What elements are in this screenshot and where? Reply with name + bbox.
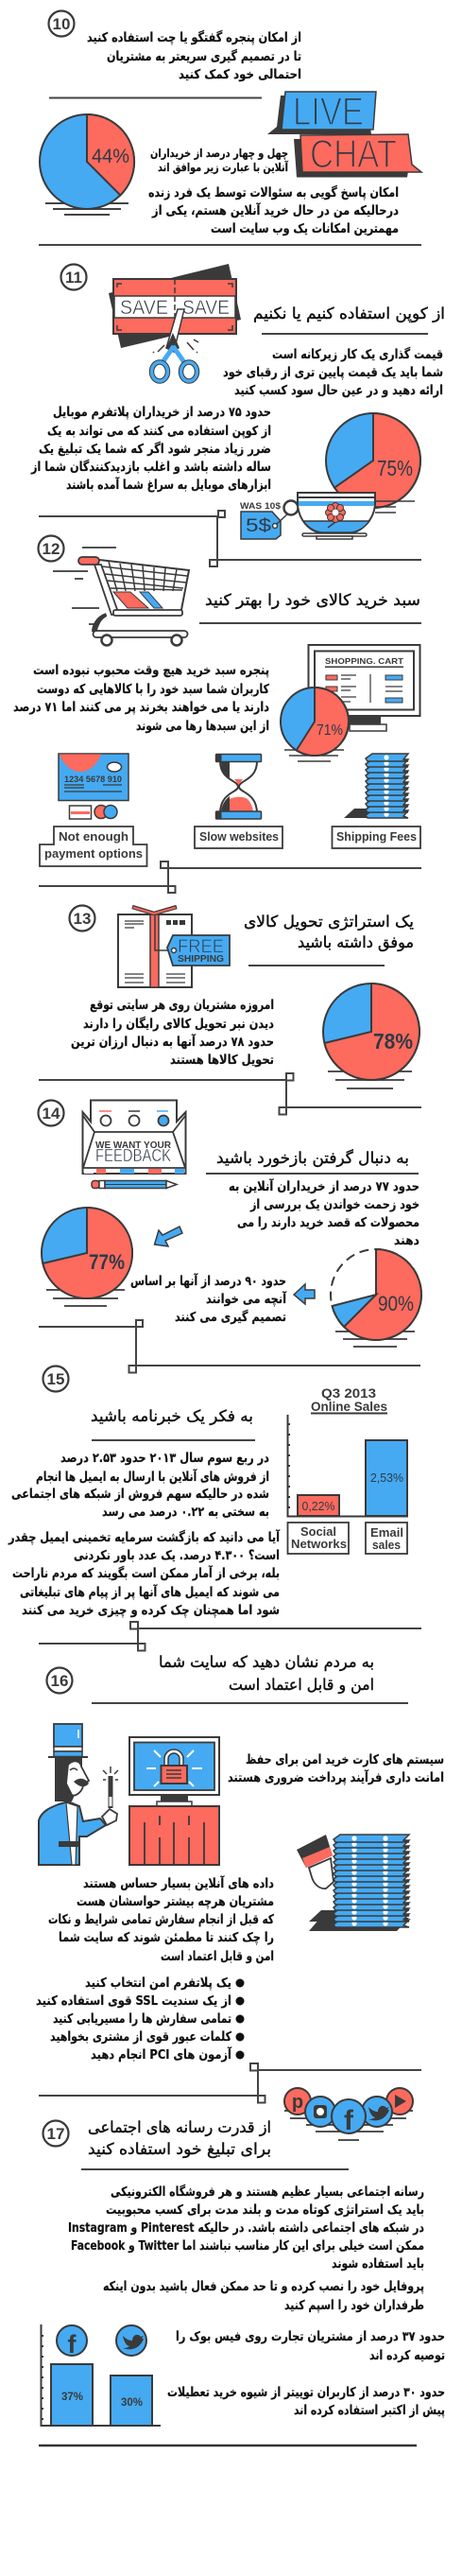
badge 17 <box>43 2120 68 2147</box>
text: 75 percent <box>30 405 271 493</box>
heading: به مردم نشان دهید که سایت شما <box>159 1653 374 1672</box>
text: cart abandonment: کاربران شما سبد خود را با کالاهایی که دوست <box>37 682 269 697</box>
pie chart 71%: 71% <box>317 722 343 739</box>
icon: coupon and scissors: SAVE <box>120 297 168 319</box>
text: email roi: شود اما همچنان چک کرده و چیزی خرید می کنند <box>22 1603 280 1618</box>
bar chart: facebook and twitter: 37% <box>61 2390 83 2403</box>
text: 75 percent: ساله داشته باشد و اغلب بازدیدکنندگان شما از <box>30 459 271 475</box>
text: 90 percent: آنچه می خوانند <box>206 1291 286 1307</box>
text: facebook stat: حدود ۳۷ درصد از مشتریان تجارت روی فیس بوک را <box>176 2329 445 2344</box>
icon: secure monitor on stand <box>129 1737 219 1865</box>
badge 13: 13 <box>74 910 91 928</box>
bulleted list: تمامی سفارش ها را مسیریابی کنید <box>53 2011 231 2027</box>
pie chart 44%: 44% <box>92 146 129 167</box>
label: slow websites: Slow websites <box>199 829 279 844</box>
icon: social network circles: f <box>344 2105 354 2136</box>
bar chart: facebook and twitter: 30% <box>121 2395 143 2409</box>
panel: section 16 trust <box>36 1653 444 2063</box>
text: free shipping: دیدن نبر تحویل کالای رایگان را دارند <box>83 1016 274 1032</box>
bar chart: facebook and twitter <box>41 2324 161 2426</box>
text: 90 percent: حدود ۹۰ درصد از آنها بر اساس <box>130 1273 286 1289</box>
text: free shipping: امروزه مشتریان روی هر سایتی توقع <box>90 998 274 1013</box>
icon: gift box and free shipping tag: FREE <box>178 937 224 957</box>
bar chart: facebook and twitter: f <box>68 2330 77 2358</box>
text: sensitive data: امن و قابل اعتماد است <box>161 1949 274 1964</box>
label: social networks: Social <box>300 1524 336 1539</box>
pie chart 77% <box>42 1208 132 1306</box>
label: email sales: Email <box>370 1525 403 1540</box>
pie chart 78%: 78% <box>373 1029 413 1053</box>
icon: pencil <box>92 1180 177 1188</box>
icon: social network circles <box>284 2088 413 2140</box>
text: secure payment <box>228 1752 444 1785</box>
text: live answer quote: امکان پاسخ گویی به سئوالات توسط یک فرد زنده <box>148 184 399 200</box>
label: shipping fees: Shipping Fees <box>336 829 417 844</box>
text: reading reviews: حدود ۷۷ درصد از خریداران آنلاین به <box>229 1178 419 1194</box>
text: intro: از امکان پنجره گفتگو یا چت استفاده کنید <box>87 29 301 45</box>
text: 44 percent lead: آنلاین با عبارت زیر موافق اند <box>158 160 289 175</box>
panel: section 11 coupons <box>30 264 445 539</box>
text: live answer quote <box>148 184 399 236</box>
icon: coupon and scissors: SAVE <box>182 297 230 319</box>
text: 44 percent lead <box>150 147 289 175</box>
icon: feedback envelope <box>83 1101 185 1174</box>
text: profile advice <box>103 2279 424 2313</box>
pie chart 75% <box>326 413 420 513</box>
badge 15: 15 <box>47 1370 64 1388</box>
badge 17: 17 <box>47 2125 64 2143</box>
heading: به دنبال گرفتن بازخورد باشید <box>216 1149 409 1168</box>
text: cart abandonment: دارند یا می خواهند بخرند پر می کنند اما ۷۱ درصد <box>13 700 269 715</box>
text: twitter stat <box>167 2385 445 2418</box>
badge 12 <box>38 535 64 562</box>
badge 14 <box>38 1101 64 1125</box>
heading: موفق داشته باشید <box>298 933 414 952</box>
icon: shopping cart monitor <box>308 645 419 731</box>
text: intro <box>87 29 301 82</box>
bulleted list <box>36 1976 244 2063</box>
text: intro: تا در تصمیم گیری سریعتر به مشتریان <box>107 48 301 64</box>
heading: امن و قابل اعتماد است <box>229 1676 374 1695</box>
text: sensitive data <box>48 1875 274 1964</box>
panel: section 13 delivery <box>70 906 419 1088</box>
text: live answer quote: درحالیکه من در حال خرید آنلاین هستم، یکی از <box>151 202 399 218</box>
panel: section 17 social media <box>41 2088 445 2426</box>
text: reading reviews <box>229 1178 419 1248</box>
text: live answer quote: مهمترین امکانات یک وب سایت است <box>211 221 399 236</box>
icon: price tag <box>240 501 288 539</box>
badge 16: 16 <box>51 1672 68 1690</box>
icon: live chat bubbles: LIVE <box>293 89 364 133</box>
icon: stack of money <box>344 754 408 818</box>
panel: section 10 live chat <box>40 11 421 236</box>
text: cart abandonment: از این سبدها رها می شوند <box>136 719 269 734</box>
icon: social network circles: p <box>292 2092 303 2113</box>
icon: thief behind money <box>297 1835 409 1931</box>
badge 16 <box>47 1668 72 1693</box>
pie chart 90% <box>331 1249 421 1347</box>
text: email share: از فروش های آنلاین با ارسال به ایمیل ها انجام <box>36 1469 269 1485</box>
label: email sales <box>366 1523 407 1554</box>
badge 11: 11 <box>65 269 82 287</box>
icon: live chat bubbles <box>267 89 421 178</box>
bar chart: online sales: 2,53% <box>370 1471 403 1485</box>
icon: live chat bubbles: CHAT <box>310 131 397 176</box>
text: 75 percent: ضرر زیاد منجر شود اگر که شما یک تبلیغ یک <box>39 441 271 457</box>
heading: از کوپن استفاده کنیم یا نکنیم <box>253 305 445 323</box>
pie chart 77%: 77% <box>89 1250 125 1274</box>
text: email roi <box>8 1529 280 1618</box>
text: reading reviews: خود زحمت خواندن یک بررسی از <box>249 1197 419 1212</box>
bar chart: online sales: Q3 2013 <box>321 1385 376 1401</box>
label: not enough payment options <box>40 827 147 866</box>
panel: section 14 feedback <box>38 1101 421 1347</box>
pie chart 75%: 75% <box>377 456 413 480</box>
text: 75 percent: ابزارهای موبایل به سراغ شما آمده باشند <box>66 477 271 493</box>
panel: section 15 newsletter <box>8 1366 408 1618</box>
text: email share <box>11 1451 269 1520</box>
icon: credit card: 1234 5678 910 <box>64 775 122 784</box>
text: pricing <box>223 346 443 398</box>
icon: credit card <box>59 754 128 819</box>
arrow: toward text <box>294 1284 315 1304</box>
icon: shopping cart monitor: SHOPPING. CART <box>325 656 404 666</box>
icon: coupon and scissors <box>109 264 241 381</box>
text: sensitive data: که قبل از انجام سفارش تمامی شرایط و نکات <box>48 1912 274 1927</box>
icon: gift box and free shipping tag <box>118 907 230 987</box>
text: 75 percent: حدود ۷۵ درصد از خریداران پلاتفرم موبایل <box>53 405 271 420</box>
text: email roi: بله، برخی از آمار ممکن است بگویند که مردم ناراحت <box>12 1565 280 1581</box>
text: email roi: آیا می دانید که بازگشت سرمایه تخمینی ایمیل چقدر <box>8 1529 280 1545</box>
heading <box>244 913 414 966</box>
heading <box>81 2118 349 2169</box>
text: twitter stat: حدود ۳۰ درصد از کاربران توییتر از شیوه خرید تعطیلات <box>167 2385 445 2400</box>
pie chart 44% <box>40 114 134 215</box>
text: intro: احتمالی خود کمک کنید <box>179 67 301 82</box>
icon: hourglass <box>215 755 261 819</box>
text: reading reviews: دهند <box>394 1233 419 1248</box>
text: 75 percent: از کوپن استفاده می کنند که می تواند به یک <box>47 424 271 439</box>
arrow: toward 77% pie <box>155 1227 182 1246</box>
text: reading reviews: محصولات که قصد خرید دارند را می <box>237 1215 419 1230</box>
text: email roi: است؟ ۴.۳۰۰ درصد. یک عدد باور نکردنی <box>74 1548 280 1563</box>
label: shipping fees <box>333 827 420 848</box>
label: not enough payment options: Not enough <box>59 829 128 844</box>
heading <box>92 1653 408 1703</box>
label: email sales: sales <box>372 1538 401 1552</box>
icon: shopping cart <box>53 548 189 645</box>
text: sensitive data: داده های آنلاین بسیار حساس هستند <box>83 1875 274 1891</box>
text: 44 percent lead: چهل و چهار درصد از خریداران <box>150 147 288 161</box>
label: slow websites <box>195 827 282 848</box>
text: facebook stat: توصیه کرده اند <box>369 2348 445 2363</box>
badge 14: 14 <box>43 1105 60 1123</box>
text: free shipping: حدود ۷۸ درصد آنها به دنبال ارزان ترین <box>71 1034 274 1050</box>
icon: feedback envelope: WE WANT YOUR <box>95 1140 171 1151</box>
bulleted list: از یک سندیت SSL قوی استفاده کنید <box>36 1993 231 2009</box>
icon: magician <box>39 1724 118 1865</box>
text: profile advice: طرفداران خود را اسپم کنید <box>284 2298 424 2313</box>
text: email share: به سختی به ۰.۲۲ درصد می رسد <box>102 1505 269 1520</box>
bulleted list: کلمات عبور قوی از مشتری بخواهید <box>50 2029 231 2045</box>
pie chart 90%: 90% <box>378 1292 414 1315</box>
badge 15 <box>43 1366 68 1392</box>
label: social networks <box>287 1523 349 1554</box>
heading: یک استراتژی تحویل کالای <box>244 913 414 931</box>
icon: price tag: WAS 10$ <box>240 501 282 512</box>
icon: price tag: 5$ <box>246 516 272 536</box>
text: facebook stat <box>176 2329 445 2363</box>
icon: feedback envelope: FEEDBACK <box>95 1146 171 1165</box>
text: email roi: می شوند که ایمیل های آنها پر از پیام های تبلیغاتی <box>20 1584 280 1600</box>
text: free shipping: تحویل کالاها هستند <box>170 1053 274 1068</box>
panel: section 12 shopping cart <box>13 535 421 866</box>
badge 10 <box>49 11 74 36</box>
text: cart abandonment <box>13 663 269 734</box>
text: email share: شده در حالیکه سهم فروش از شبکه های اجتماعی <box>11 1487 269 1502</box>
bar chart: online sales: 0,22% <box>302 1499 335 1513</box>
text: cart abandonment: پنجره سبد خرید هیچ وقت محبوب نبوده است <box>33 663 269 678</box>
heading: برای تبلیغ خود استفاده کنید <box>88 2140 271 2159</box>
pie chart 78% <box>323 983 419 1088</box>
badge 13 <box>70 906 94 931</box>
text: free shipping <box>71 998 274 1068</box>
bar chart: online sales: Online Sales <box>311 1399 387 1414</box>
text: email share: در ربع سوم سال ۲۰۱۳ حدود ۲.۵۳ درصد <box>60 1451 269 1466</box>
bar chart: online sales <box>287 1385 408 1517</box>
heading: از قدرت رسانه های اجتماعی <box>88 2118 271 2137</box>
label: social networks: Networks <box>291 1537 347 1551</box>
bulleted list: یک پلاتفرم امن انتخاب کنید <box>85 1976 231 1991</box>
badge 12: 12 <box>43 540 60 558</box>
icon: tea cup <box>283 493 375 539</box>
text: sensitive data: را چک کنند تا مطمئن شوند که سایت شما <box>59 1930 274 1945</box>
badge 11 <box>60 265 87 289</box>
text: social strategy: باید استفاده شوند <box>332 2256 424 2271</box>
text: 90 percent <box>130 1273 286 1325</box>
icon: gift box and free shipping tag: SHIPPING <box>178 954 224 965</box>
label: not enough payment options: payment options <box>44 846 143 861</box>
text: sensitive data: مشتریان هرچه بیشتر حواسشان هست <box>77 1894 274 1909</box>
heading: به فکر یک خبرنامه باشید <box>91 1407 253 1426</box>
heading: سبد خرید کالای خود را بهتر کنید <box>205 591 420 610</box>
badge 10: 10 <box>53 15 70 33</box>
bulleted list: آزمون های PCI انجام دهید <box>91 2046 231 2063</box>
pie chart 71% <box>281 688 349 761</box>
text: 90 percent: تصمیم گیری می کنند <box>175 1309 286 1325</box>
text: social strategy <box>68 2184 424 2271</box>
